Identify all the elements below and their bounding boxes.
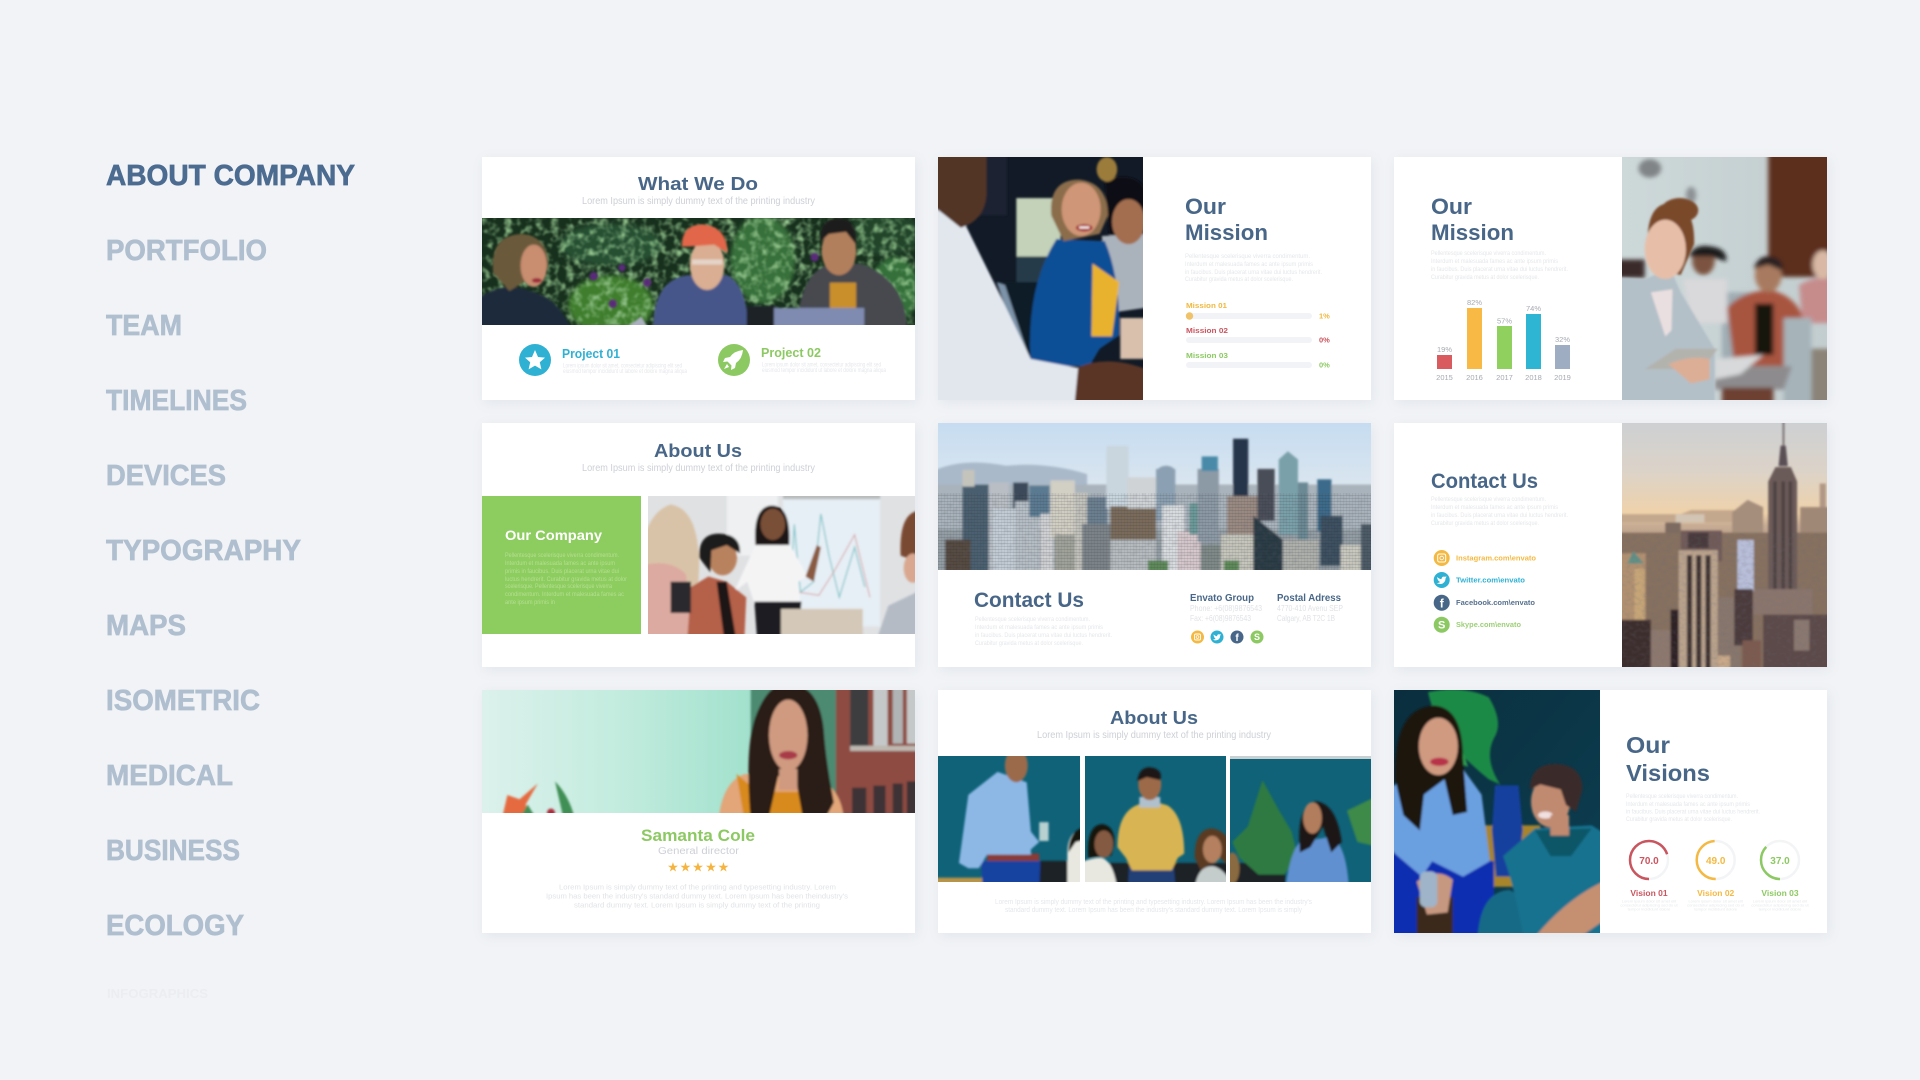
photo: man with glass bbox=[938, 756, 1080, 882]
gauge: vision 02: Vision 02 bbox=[1697, 888, 1735, 898]
contact details: envato group: Envato Group bbox=[1190, 593, 1254, 604]
body text bbox=[1431, 250, 1568, 281]
body text: Interdum et malesuada fames ac ante ipsum primis bbox=[1431, 504, 1559, 511]
gauge: vision 01: consectetur adipiscing sed do ut bbox=[1620, 902, 1678, 908]
photo: smiling woman at meeting bbox=[938, 157, 1143, 400]
contact: facebook bbox=[1434, 595, 1535, 611]
heading: Mission bbox=[1431, 220, 1514, 245]
panel: team member profile bbox=[482, 682, 923, 933]
gauge: vision 03: tempor incididunt dolore bbox=[1759, 906, 1802, 912]
body text bbox=[975, 616, 1112, 647]
project 01 text: eiusmod tempor incididunt ut labore et dolore magna aliqua bbox=[563, 368, 687, 375]
body text: in faucibus. Duis placerat urna vitae dui luctus hendrerit. bbox=[975, 632, 1112, 639]
panel: our mission progress bbox=[930, 149, 1371, 410]
body text: Pellentesque scelerisque viverra condimentum. bbox=[975, 616, 1090, 623]
contact: skype: S bbox=[1438, 620, 1445, 632]
body text: Curabitur gravida metus at dolor scelerisque. bbox=[1185, 276, 1293, 283]
project 02 text: eiusmod tempor incididunt ut labore et dolore magna aliqua bbox=[762, 367, 886, 374]
heading: Contact Us bbox=[1431, 470, 1538, 493]
bar chart: 2015 bbox=[1436, 373, 1453, 382]
bar chart: 2018 bbox=[1525, 373, 1542, 382]
callout body: Pellentesque scelerisque viverra condimentum. bbox=[505, 553, 619, 559]
body text bbox=[1431, 496, 1568, 527]
gauge: vision 02: Lorem ipsum dolor sit amet elit bbox=[1688, 898, 1744, 904]
contact: skype: Skype.com\envato bbox=[1456, 620, 1521, 629]
heading: Our bbox=[1431, 194, 1472, 219]
heading: Our bbox=[1626, 732, 1670, 758]
progress: mission 02: Mission 02 bbox=[1186, 326, 1228, 335]
menu item: MAPS bbox=[106, 610, 186, 642]
subtitle: Lorem Ipsum is simply dummy text of the printing industry bbox=[582, 196, 815, 207]
body text: Lorem Ipsum is simply dummy text of the printing and typesetting industry. Lorem Ipsum has been the industry's bbox=[995, 899, 1312, 906]
body text: standard dummy text. Lorem Ipsum has been the industry's standard dummy text. Lorem Ipsum is simply bbox=[1005, 907, 1302, 914]
bar chart: 74% bbox=[1526, 304, 1541, 313]
panel: our mission bar chart bbox=[1394, 149, 1835, 410]
photo: three colleagues in front of foliage bbox=[482, 218, 915, 325]
body text: Interdum et malesuada fames ac ante ipsum primis bbox=[1185, 261, 1314, 268]
body text: in faucibus. Duis placerat urna vitae dui luctus hendrerit. bbox=[1431, 266, 1568, 273]
biography: Lorem Ipsum is simply dummy text of the printing and typesetting industry. Lorem bbox=[559, 882, 836, 892]
contact details: postal address: Calgary, AB T2C 1B bbox=[1277, 613, 1335, 623]
bar chart: 2017 bbox=[1496, 373, 1513, 382]
menu item: TIMELINES bbox=[106, 385, 247, 417]
project 02 label: Project 02 bbox=[761, 345, 821, 360]
body text bbox=[1626, 793, 1760, 823]
rating stars bbox=[667, 860, 729, 874]
project 02 text: Lorem ipsum dolor sit amet, consectetur adipiscing elit sed bbox=[762, 362, 881, 368]
gauge: vision 03 bbox=[1751, 841, 1809, 912]
body text: Pellentesque scelerisque viverra condimentum. bbox=[1626, 793, 1738, 800]
photo: empire state skyline at sunset bbox=[1622, 423, 1827, 667]
body text: Curabitur gravida metus at dolor scelerisque. bbox=[975, 640, 1083, 647]
gauge: vision 03: consectetur adipiscing sed do ut bbox=[1751, 902, 1809, 908]
panel: what we do bbox=[480, 157, 921, 400]
body text: in faucibus. Duis placerat urna vitae dui luctus hendrerit. bbox=[1431, 512, 1568, 519]
contact: facebook: Facebook.com\envato bbox=[1456, 598, 1535, 607]
sidebar: category menu bbox=[106, 160, 355, 1001]
body text: Interdum et malesuada fames ac ante ipsum primis bbox=[1431, 258, 1559, 265]
contact: instagram bbox=[1434, 550, 1536, 566]
biography: standard dummy text. Lorem Ipsum is simply dummy text of the printing bbox=[574, 900, 820, 910]
photo: woman with tablet in classroom bbox=[1622, 157, 1827, 400]
contact details: envato group: Fax: +6(08)9876543 bbox=[1190, 613, 1251, 623]
icons: social row: f bbox=[1235, 633, 1239, 644]
green callout: our company bbox=[482, 496, 641, 634]
subtitle: Lorem Ipsum is simply dummy text of the printing industry bbox=[1037, 730, 1271, 741]
project 01 text: Lorem ipsum dolor sit amet, consectetur adipiscing elit sed bbox=[563, 362, 682, 370]
gauge: vision 03: Lorem ipsum dolor sit amet elit bbox=[1753, 898, 1808, 904]
rating stars: ★ bbox=[718, 860, 729, 874]
body text: Interdum et malesuada fames ac ante ipsum primis bbox=[1626, 801, 1751, 808]
menu item: BUSINESS bbox=[106, 835, 240, 867]
menu item: TYPOGRAPHY bbox=[106, 535, 301, 567]
callout body: luctus hendrerit. Curabitur gravida metus at dolor bbox=[505, 577, 627, 583]
body text: in faucibus. Duis placerat urna vitae dui luctus hendrerit. bbox=[1185, 269, 1322, 276]
callout body bbox=[505, 553, 627, 606]
gauge: vision 02: tempor incididunt dolore bbox=[1694, 906, 1738, 912]
menu item: MEDICAL bbox=[106, 760, 233, 792]
body text bbox=[1185, 253, 1322, 283]
bar chart: 32% bbox=[1555, 335, 1570, 344]
rating stars: ★ bbox=[667, 860, 679, 874]
heading: About Us bbox=[654, 440, 742, 461]
contact: twitter bbox=[1434, 572, 1525, 588]
menu item: ECOLOGY bbox=[106, 910, 244, 942]
body text: Pellentesque scelerisque viverra condimentum. bbox=[1185, 253, 1310, 260]
bar chart: 57% bbox=[1497, 316, 1512, 326]
icons: social row: S bbox=[1254, 632, 1260, 642]
gauge: vision 03: Vision 03 bbox=[1761, 888, 1799, 898]
photo: two women talking bbox=[1394, 690, 1600, 933]
gauge: vision 01: 70.0 bbox=[1639, 856, 1659, 867]
progress: mission 01: Mission 01 bbox=[1186, 301, 1227, 310]
contact details: postal address bbox=[1277, 593, 1343, 623]
heading: Visions bbox=[1626, 760, 1710, 786]
callout body: Interdum et malesuada fames ac ante ipsum bbox=[505, 561, 615, 567]
bar chart: 2019 bbox=[1554, 373, 1571, 382]
icons: social row bbox=[1191, 630, 1264, 644]
contact details: envato group bbox=[1190, 593, 1262, 623]
menu item: TEAM bbox=[106, 310, 182, 342]
progress: mission 02: 0% bbox=[1319, 336, 1330, 344]
callout body: primis in faucibus. Duis placerat urna vitae dui bbox=[505, 569, 619, 575]
progress: mission 01 bbox=[1186, 301, 1330, 320]
menu item: PORTFOLIO bbox=[106, 235, 267, 267]
photo: woman beside plants bbox=[1230, 756, 1371, 882]
bar chart: 2016 bbox=[1466, 373, 1483, 382]
gauge: vision 01: tempor incididunt dolore bbox=[1628, 906, 1671, 912]
body text: in faucibus. Duis placerat urna vitae dui luctus hendrerit. bbox=[1626, 808, 1760, 816]
gauge: vision 01: Vision 01 bbox=[1630, 888, 1668, 898]
heading: Contact Us bbox=[974, 589, 1084, 612]
progress: mission 03: 0% bbox=[1319, 360, 1330, 370]
gauge: vision 02: consectetur adipiscing sed do ut bbox=[1687, 902, 1745, 908]
panel: about us company bbox=[482, 423, 923, 667]
subtitle: Lorem Ipsum is simply dummy text of the printing industry bbox=[582, 463, 815, 474]
contact: twitter: Twitter.com\envato bbox=[1456, 576, 1525, 584]
gauge: vision 02 bbox=[1687, 841, 1745, 912]
body text bbox=[995, 899, 1312, 914]
body text: Curabitur gravida metus at dolor scelerisque. bbox=[1431, 520, 1539, 527]
heading bbox=[1185, 194, 1268, 245]
project 01 label: Project 01 bbox=[562, 346, 620, 361]
progress: mission 03 bbox=[1186, 351, 1330, 370]
photo: woman in orange top against mint wall bbox=[482, 690, 915, 813]
contact details: envato group: Phone: +6(08)9876543 bbox=[1190, 603, 1262, 613]
menu item faded: INFOGRAPHICS bbox=[107, 986, 208, 1001]
gauge: vision 03: 37.0 bbox=[1770, 856, 1790, 867]
biography bbox=[546, 882, 848, 910]
gauge: vision 02: 49.0 bbox=[1706, 856, 1726, 867]
contact details: postal address: 4770-410 Avenu SEP bbox=[1277, 603, 1343, 613]
body text: Curabitur gravida metus at dolor scelerisque. bbox=[1431, 274, 1539, 281]
role: General director bbox=[658, 846, 740, 857]
panel: about us team photos bbox=[930, 690, 1379, 933]
progress: mission 01: 1% bbox=[1319, 312, 1330, 320]
rating stars: ★ bbox=[692, 860, 704, 874]
menu item active: ABOUT COMPANY bbox=[106, 160, 355, 192]
menu item: ISOMETRIC bbox=[106, 685, 260, 717]
panel: our visions bbox=[1386, 689, 1827, 943]
photo: city skyline bbox=[938, 423, 1371, 570]
contact: instagram: Instagram.com\envato bbox=[1456, 554, 1536, 562]
heading bbox=[1431, 194, 1514, 245]
body text: Interdum et malesuada fames ac ante ipsum primis bbox=[975, 624, 1104, 631]
contact details: postal address: Postal Adress bbox=[1277, 593, 1341, 604]
heading: About Us bbox=[1110, 707, 1198, 728]
contact: facebook: f bbox=[1440, 596, 1445, 610]
callout body: scelerisque. Pellentesque scelerisque viverra bbox=[505, 584, 613, 590]
name: Samanta Cole bbox=[641, 827, 755, 845]
bar chart: 82% bbox=[1467, 298, 1482, 307]
panel: contact us city bbox=[930, 423, 1379, 667]
panel: contact us list bbox=[1394, 420, 1835, 676]
rating stars: ★ bbox=[680, 860, 691, 874]
heading: Mission bbox=[1185, 220, 1268, 245]
bar chart bbox=[1436, 298, 1571, 382]
heading bbox=[1626, 732, 1710, 786]
heading: What We Do bbox=[638, 173, 758, 194]
project 02 text bbox=[762, 362, 886, 374]
heading: Our bbox=[1185, 194, 1226, 219]
icon: star badge bbox=[519, 344, 551, 376]
progress: mission 02 bbox=[1186, 326, 1330, 344]
icon: rocket badge bbox=[718, 344, 750, 376]
biography: Ipsum has been the industry's standard dummy text. Lorem Ipsum has been theindustry's bbox=[546, 892, 848, 900]
photo: man in yellow sweater bbox=[1085, 756, 1226, 882]
photo: presentation at whiteboard bbox=[648, 496, 915, 634]
callout heading: Our Company bbox=[505, 527, 602, 543]
progress: mission 03: Mission 03 bbox=[1186, 351, 1228, 360]
body text: Pellentesque scelerisque viverra condimentum. bbox=[1431, 250, 1546, 257]
menu item: DEVICES bbox=[106, 460, 226, 492]
callout body: condimentum. Interdum et malesuada fames ac bbox=[505, 592, 624, 598]
rating stars: ★ bbox=[705, 860, 717, 874]
project 01 text bbox=[563, 362, 687, 375]
callout body: ante ipsum primis in bbox=[505, 600, 555, 606]
bar chart: 19% bbox=[1437, 345, 1452, 354]
contact: skype bbox=[1434, 617, 1521, 633]
gauge: vision 01: Lorem ipsum dolor sit amet elit bbox=[1622, 898, 1677, 904]
body text: Pellentesque scelerisque viverra condimentum. bbox=[1431, 496, 1546, 503]
gauge: vision 01 bbox=[1620, 841, 1678, 912]
body text: Curabitur gravida metus at dolor scelerisque. bbox=[1626, 816, 1732, 823]
